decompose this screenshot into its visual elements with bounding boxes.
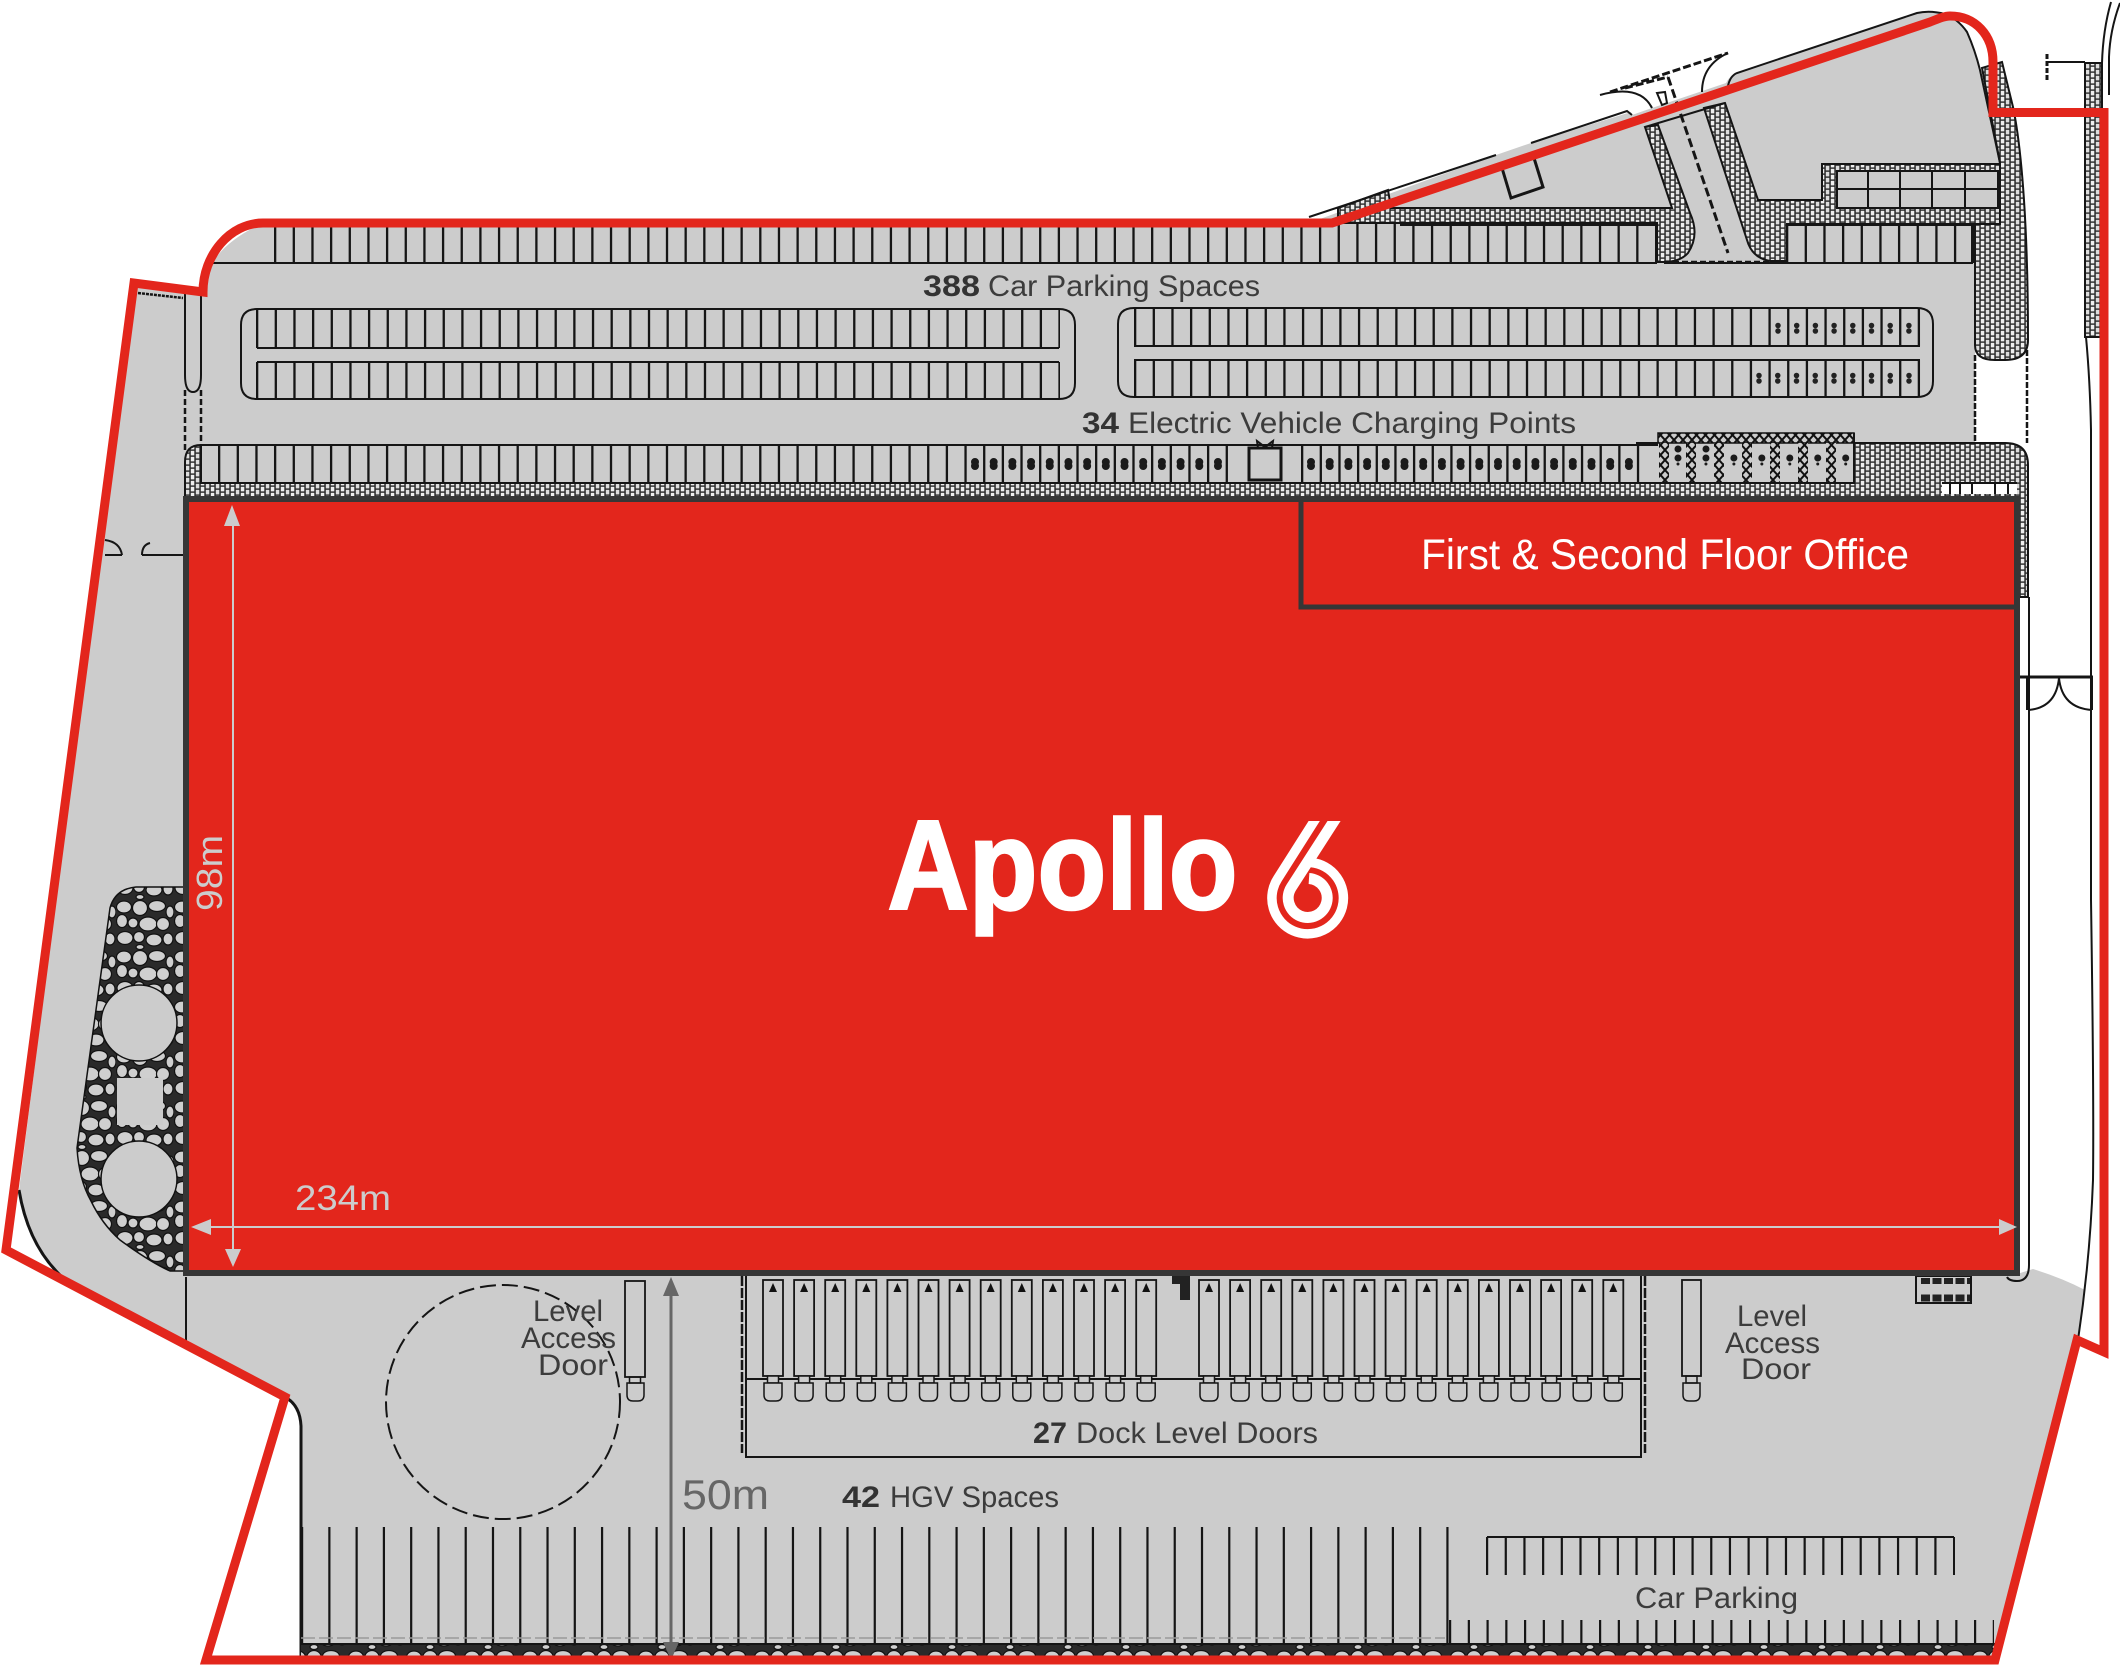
turning circle: [386, 1285, 620, 1519]
label: HGV spaces: HGV Spaces: [890, 1481, 1059, 1514]
label: HGV spaces: 42: [842, 1481, 880, 1514]
service bay inset: [1942, 483, 2017, 494]
EV charging bays: [1658, 433, 1854, 483]
label: level access door left: Access: [521, 1322, 616, 1355]
label: dock level doors: Dock Level Doors: [1076, 1417, 1318, 1450]
label: level access door left: Door: [538, 1349, 608, 1382]
cobble strip along bottom: [301, 1644, 1995, 1657]
label: level access door right: Door: [1741, 1353, 1811, 1386]
level access door: right bay: [1682, 1280, 1701, 1401]
stair detail: [1172, 1276, 1190, 1300]
dock enclosure: [742, 1276, 1645, 1457]
icon: apollo six mark: [1272, 804, 1345, 934]
car parking island: right with EV points: [1118, 308, 1933, 397]
label: level access door left: Level: [533, 1295, 603, 1328]
logo wordmark: Apollo: [888, 794, 1238, 936]
label: level access door right: Access: [1725, 1327, 1820, 1360]
car parking row: top: [213, 225, 1974, 263]
car parking island: left: [241, 309, 1075, 399]
paved grid beside top right: [1837, 171, 1998, 208]
label: level access door right: Level: [1737, 1300, 1807, 1333]
hatched paving: [185, 62, 2102, 597]
label: level access door left: [521, 1295, 616, 1382]
dock level doors: [763, 1280, 1623, 1401]
dimension: 98m height: [189, 505, 241, 1267]
label: EV charging points: Electric Vehicle Charging Points: [1128, 407, 1576, 440]
dimension: 234m width: 234m: [295, 1179, 391, 1218]
building footprint: [186, 499, 2017, 1273]
car parking row: lower right lower: [1449, 1620, 1994, 1644]
dimension: 234m width: [191, 1179, 2017, 1235]
car parking row: along building with EV points: [201, 441, 1658, 483]
dimension: 50m yard depth: 50m: [682, 1471, 769, 1518]
label: level access door right: [1725, 1300, 1820, 1386]
first and second floor office block: [1301, 499, 2017, 607]
label: EV charging points: 34: [1082, 407, 1119, 440]
cobble landscaping: [77, 887, 186, 1271]
label: car parking spaces: Car Parking Spaces: [988, 270, 1260, 303]
small bike store: [1916, 1276, 1971, 1303]
HGV spaces: [301, 1586, 1995, 1644]
dimension: 98m height: 98m: [189, 835, 230, 911]
first and second floor office block: First & Second Floor Office: [1421, 531, 1909, 579]
level access door: left bay: [625, 1281, 645, 1401]
dimension: 50m yard depth: [663, 1277, 769, 1660]
label: car parking: Car Parking: [1635, 1582, 1798, 1615]
label: dock level doors: 27: [1033, 1417, 1067, 1450]
label: car parking spaces: 388: [923, 270, 980, 303]
car parking row: lower right upper: [1486, 1537, 1955, 1556]
